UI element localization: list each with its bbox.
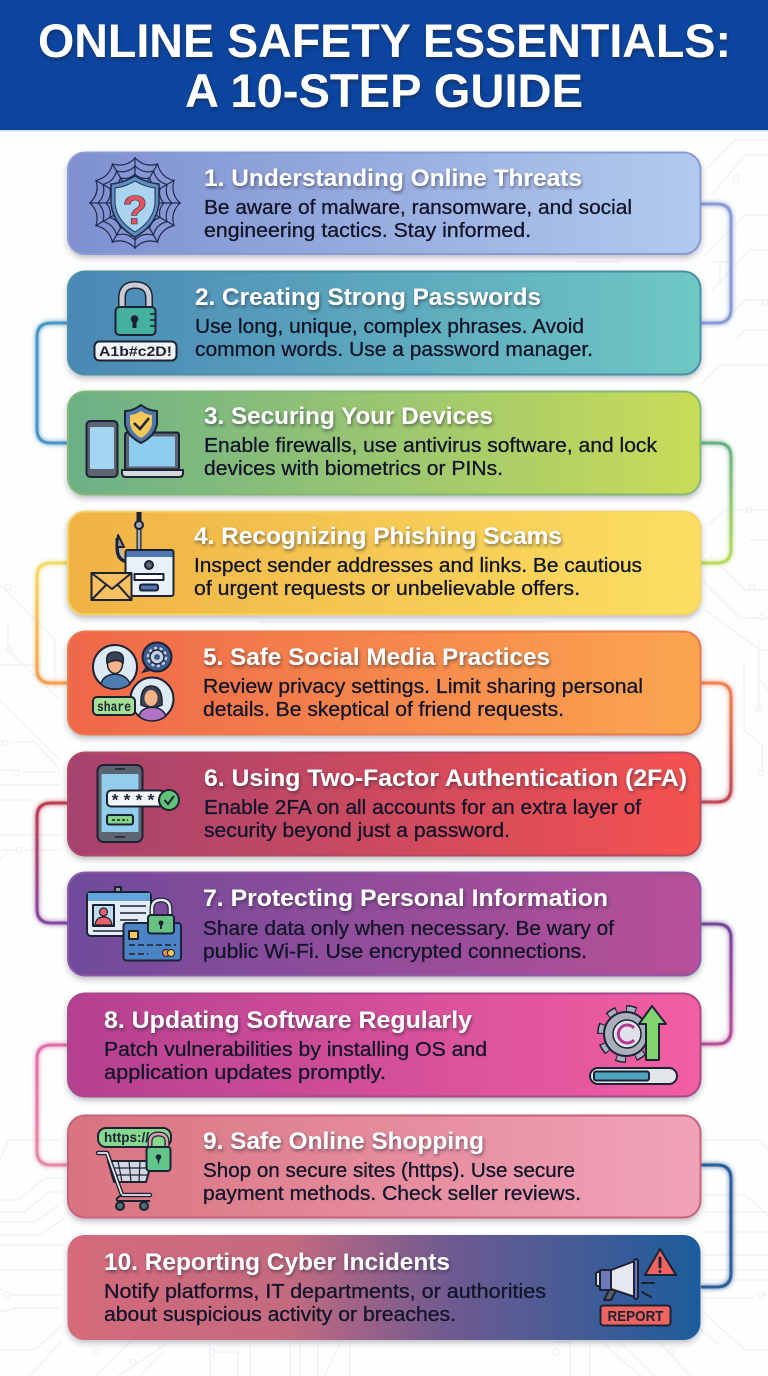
step 7 description: public Wi-Fi. Use encrypted connections. — [203, 941, 587, 963]
step 3 description: Enable firewalls, use antivirus software, and lock — [204, 435, 658, 457]
panel 9: safe online shopping — [68, 1116, 700, 1218]
icon: id badge, credit card and lock — [87, 887, 181, 960]
connector: step 1 to 2 — [701, 204, 731, 323]
icon: megaphone, warning and report tag — [596, 1249, 676, 1326]
connector: step 2 to 3 — [37, 323, 67, 443]
step 2 description: Use long, unique, complex phrases. Avoid — [195, 316, 584, 338]
panel 7: protecting personal information — [68, 872, 700, 976]
icon: padlock with password — [94, 285, 176, 360]
icon: megaphone, warning and report tag: REPORT — [608, 1308, 664, 1325]
icon: spider web and shield — [84, 152, 186, 254]
step 9 description — [203, 1160, 581, 1205]
header underline — [0, 130, 768, 132]
step 10 description: about suspicious activity or breaches. — [104, 1304, 456, 1326]
step 5 description: Review privacy settings. Limit sharing personal — [203, 676, 643, 698]
step 9 description: payment methods. Check seller reviews. — [203, 1183, 581, 1205]
step 7 description: Share data only when necessary. Be wary of — [203, 918, 614, 940]
icon: padlock with password: A1b#c2D! — [99, 343, 172, 359]
connector: step 5 to 6 — [701, 683, 731, 802]
panel 5: safe social media practices — [68, 632, 700, 734]
step 1 description: engineering tactics. Stay informed. — [204, 220, 531, 242]
step 5 heading: 5. Safe Social Media Practices — [203, 644, 550, 671]
icon: phone, laptop and shield — [86, 405, 183, 477]
step 8 heading: 8. Updating Software Regularly — [104, 1007, 473, 1034]
step 6 description — [204, 797, 641, 842]
step 10 description — [104, 1281, 546, 1326]
panel 2: creating strong passwords — [68, 272, 700, 374]
step 1 description — [204, 197, 632, 242]
step 6 description: security beyond just a password. — [204, 820, 510, 842]
icon: social users, gear and share tag — [93, 642, 174, 721]
step 2 heading: 2. Creating Strong Passwords — [195, 284, 541, 311]
step 10 description: Notify platforms, IT departments, or authorities — [104, 1281, 546, 1303]
step 5 description: details. Be skeptical of friend requests. — [203, 699, 564, 721]
step 4 description — [194, 555, 642, 600]
icon: phone with code and check: **** — [110, 793, 156, 812]
icon: gear, arrow and progress bar — [590, 1006, 677, 1084]
connector: step 3 to 4 — [701, 443, 731, 563]
step 4 description: of urgent requests or unbelievable offers. — [194, 578, 580, 600]
icon: social users, gear and share tag: share — [97, 701, 131, 716]
step 4 description: Inspect sender addresses and links. Be cautious — [194, 555, 642, 577]
icon: phone with code and check — [98, 765, 179, 842]
title: A 10-STEP GUIDE — [185, 64, 583, 117]
step 6 heading: 6. Using Two-Factor Authentication (2FA) — [204, 765, 687, 792]
step 5 description — [203, 676, 643, 721]
connector: step 4 to 5 — [37, 563, 67, 683]
connector: step 9 to 10 — [701, 1165, 731, 1287]
title — [38, 14, 731, 117]
step 4 heading: 4. Recognizing Phishing Scams — [194, 523, 562, 550]
connector: step 7 to 8 — [701, 924, 731, 1044]
step 7 description — [203, 918, 614, 963]
step 9 description: Shop on secure sites (https). Use secure — [203, 1160, 575, 1182]
step 3 description — [204, 435, 658, 480]
panel 3: securing your devices — [68, 392, 700, 494]
panel 1: understanding online threats — [68, 152, 700, 254]
step 1 description: Be aware of malware, ransomware, and social — [204, 197, 632, 219]
icon: spider web and shield: ? — [122, 187, 148, 233]
header band — [0, 0, 768, 130]
step 6 description: Enable 2FA on all accounts for an extra layer of — [204, 797, 641, 819]
icon: https tag, cart and lock: https:// — [104, 1129, 149, 1145]
icon: hook, login window and envelope — [92, 512, 174, 600]
panel 6: two-factor authentication — [68, 752, 700, 856]
step 3 heading: 3. Securing Your Devices — [204, 403, 493, 430]
step 8 description — [104, 1039, 487, 1084]
connector: step 8 to 9 — [37, 1045, 67, 1165]
title: ONLINE SAFETY ESSENTIALS: — [38, 14, 731, 67]
step 2 description — [195, 316, 593, 361]
step 3 description: devices with biometrics or PINs. — [204, 458, 503, 480]
connector: step 6 to 7 — [37, 803, 67, 923]
step 8 description: application updates promptly. — [104, 1062, 386, 1084]
step 10 heading: 10. Reporting Cyber Incidents — [104, 1249, 450, 1276]
step 7 heading: 7. Protecting Personal Information — [203, 885, 608, 912]
step 1 heading: 1. Understanding Online Threats — [204, 165, 582, 192]
panel 4: recognizing phishing scams — [68, 512, 700, 614]
step 9 heading: 9. Safe Online Shopping — [203, 1128, 484, 1155]
panel 10: reporting cyber incidents — [68, 1235, 700, 1340]
icon: https tag, cart and lock — [98, 1128, 171, 1210]
step 2 description: common words. Use a password manager. — [195, 339, 593, 361]
step 8 description: Patch vulnerabilities by installing OS and — [104, 1039, 487, 1061]
panel 8: updating software regularly — [68, 994, 700, 1096]
